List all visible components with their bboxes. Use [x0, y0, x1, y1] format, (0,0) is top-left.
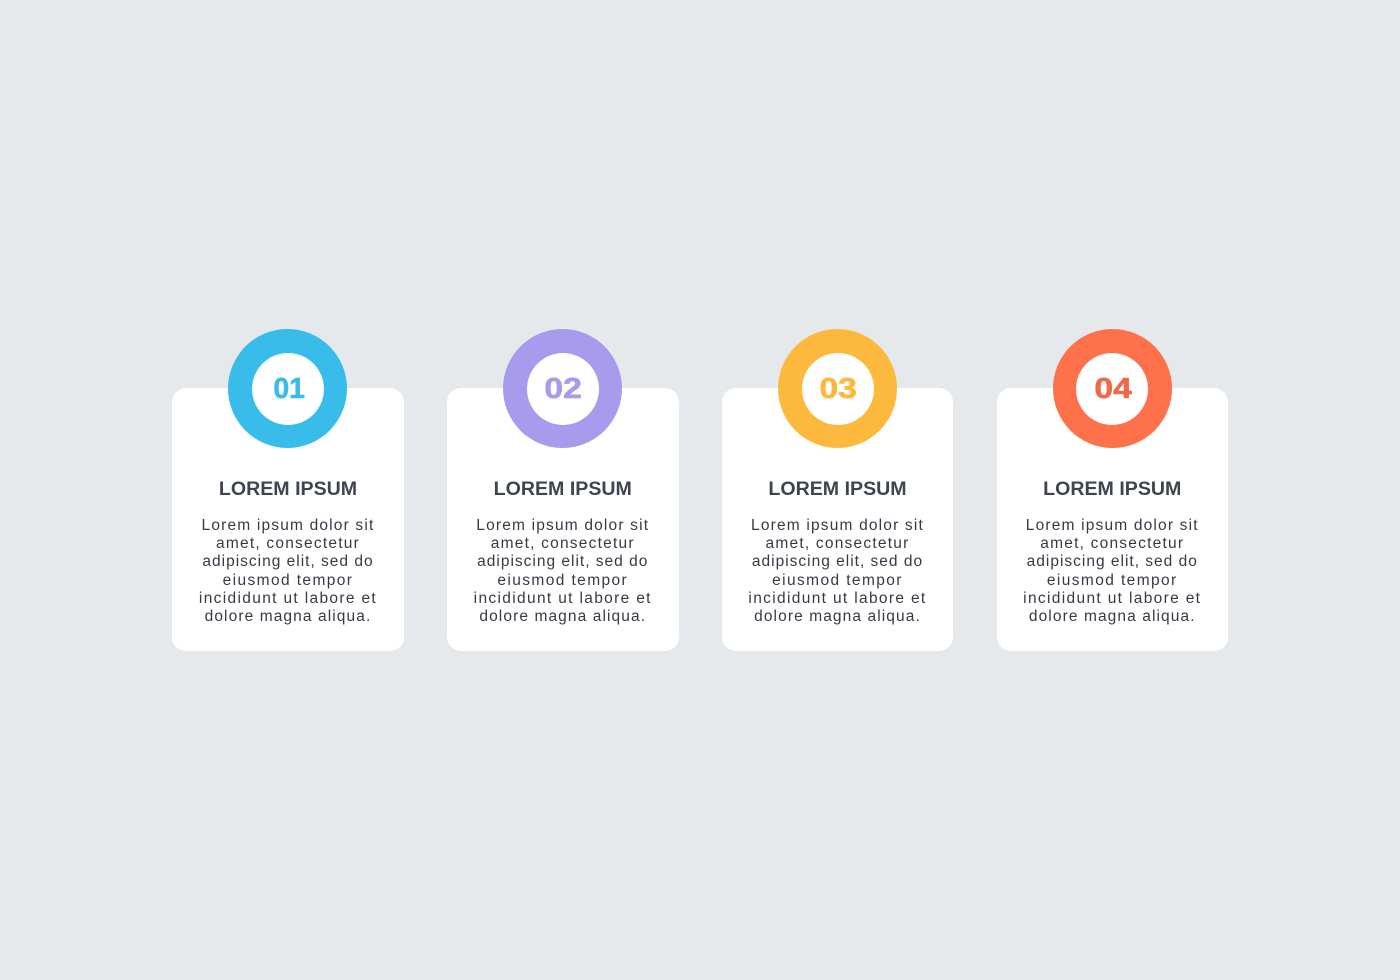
- text block: step 3: amet, consectetur: [766, 535, 909, 552]
- text block: step 3: dolore magna aliqua.: [754, 608, 921, 625]
- text block: step 2: [474, 517, 652, 625]
- text block: step 2: eiusmod tempor: [497, 572, 628, 589]
- text block: step 2: Lorem ipsum dolor sit: [476, 517, 649, 534]
- text block: step 1: incididunt ut labore et: [199, 590, 377, 607]
- panel: step 4 card: [996, 388, 1228, 651]
- panel: step 3 card: [722, 388, 953, 651]
- text block: step 2: amet, consectetur: [491, 535, 635, 552]
- text block: step 1: dolore magna aliqua.: [205, 608, 371, 625]
- text block: step 4: eiusmod tempor: [1047, 572, 1178, 589]
- text block: step 2: incididunt ut labore et: [474, 590, 652, 607]
- heading: step 3: LOREM IPSUM: [768, 478, 907, 500]
- text block: step 3: adipiscing elit, sed do: [752, 553, 923, 570]
- text block: step 4: adipiscing elit, sed do: [1027, 553, 1198, 570]
- text block: step 4: dolore magna aliqua.: [1029, 608, 1196, 625]
- text block: step 3: eiusmod tempor: [772, 572, 903, 589]
- heading: step 2: LOREM IPSUM: [494, 478, 632, 500]
- icon: step 1 number ring: 01: [273, 372, 305, 404]
- panel: step 2 card: [447, 388, 678, 651]
- icon: step 2 number ring: 02: [545, 372, 582, 404]
- text block: step 4: incididunt ut labore et: [1023, 590, 1201, 607]
- icon: step 3 number ring: [778, 329, 897, 448]
- text block: step 1: amet, consectetur: [216, 535, 360, 552]
- text block: step 3: incididunt ut labore et: [748, 590, 927, 607]
- heading: step 1: LOREM IPSUM: [219, 478, 357, 500]
- text block: step 3: Lorem ipsum dolor sit: [751, 517, 924, 534]
- text block: step 1: [199, 517, 377, 625]
- text block: step 2: adipiscing elit, sed do: [477, 553, 648, 570]
- text block: step 1: adipiscing elit, sed do: [202, 553, 374, 570]
- text block: step 2: dolore magna aliqua.: [479, 608, 646, 625]
- icon: step 4 number ring: 04: [1094, 372, 1132, 404]
- panel: step 1 card: [172, 388, 404, 651]
- icon: step 3 number ring: 03: [820, 372, 857, 404]
- text block: step 1: eiusmod tempor: [223, 572, 353, 589]
- text block: step 4: Lorem ipsum dolor sit: [1026, 517, 1199, 534]
- text block: step 3: [748, 517, 927, 625]
- text block: step 1: Lorem ipsum dolor sit: [202, 517, 374, 534]
- icon: step 4 number ring: [1052, 329, 1172, 448]
- icon: step 2 number ring: [503, 329, 622, 448]
- heading: step 4: LOREM IPSUM: [1043, 478, 1181, 500]
- text block: step 4: [1023, 517, 1201, 625]
- icon: step 1 number ring: [228, 329, 347, 448]
- text block: step 4: amet, consectetur: [1040, 535, 1184, 552]
